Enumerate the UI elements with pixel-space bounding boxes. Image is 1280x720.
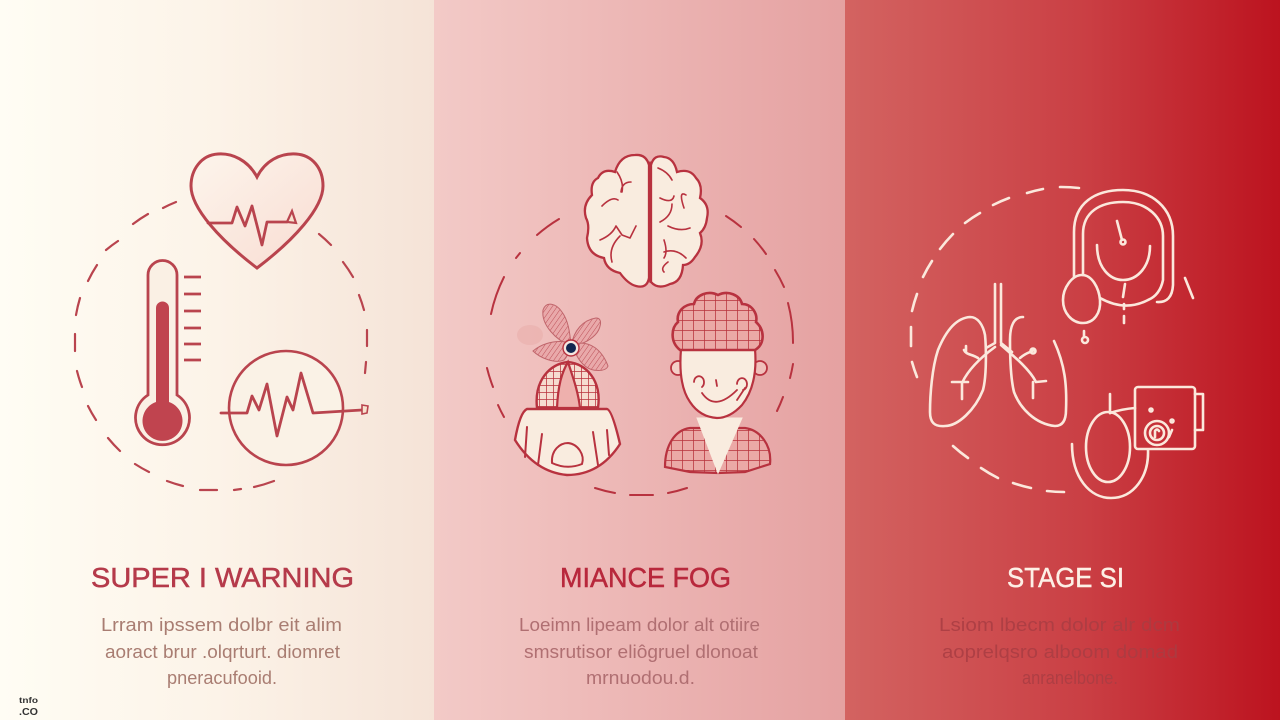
flower eye [563,340,579,356]
panel: brain fog [434,0,845,720]
small corner mark: .CO [19,707,38,718]
heading: stage: STAGE SI [1007,562,1124,593]
text block: early warning: Lrram ipssem dolbr eit alim [101,614,342,635]
face [680,349,755,418]
text block: brain fog [519,614,760,688]
text block: stage [939,614,1180,688]
heading: brain fog: MIANCE FOG [560,562,731,593]
icon: thermometer [136,260,201,445]
flower petals [517,304,608,370]
text block: early warning [101,614,342,688]
icon: brain [585,155,708,287]
icon: pressure gauge [1063,190,1173,343]
small corner mark [19,696,38,718]
dashed circle: stage [911,187,1193,492]
panel: stage [845,0,1280,720]
text block: early warning: pneracufooid. [167,667,277,688]
shoulders [665,428,770,473]
text block: stage: Lsiom lbecm dolor alr dcm [939,614,1180,635]
icon: flower figure [515,304,620,475]
small corner mark: tnfo [19,696,38,705]
text block: stage: anranelbone. [1022,667,1118,688]
icon: blood pressure cuff [1072,387,1203,498]
heading: early warning: SUPER I WARNING [91,562,354,593]
brain cap [673,293,763,350]
icon: lungs [930,284,1066,426]
text block: stage: aoprelqsro alboom domad [942,641,1178,662]
icon: pulse circle [221,351,368,465]
dashed circle: early warning [75,202,367,490]
body [515,409,620,475]
icon: person with brain [665,293,770,473]
text block: early warning: aoract brur .olqrturt. diomret [105,641,340,662]
neck [697,418,742,473]
text block: brain fog: smsrutisor eliôgruel dlonoat [524,641,758,662]
ears [671,361,685,375]
text block: brain fog: mrnuodou.d. [586,667,695,688]
dome [537,362,599,408]
text block: brain fog: Loeimn lipeam dolor alt otiire [519,614,760,635]
panel: early warning [0,0,434,720]
dashed circle: brain fog [487,216,793,495]
icon: heart with pulse [191,154,323,268]
